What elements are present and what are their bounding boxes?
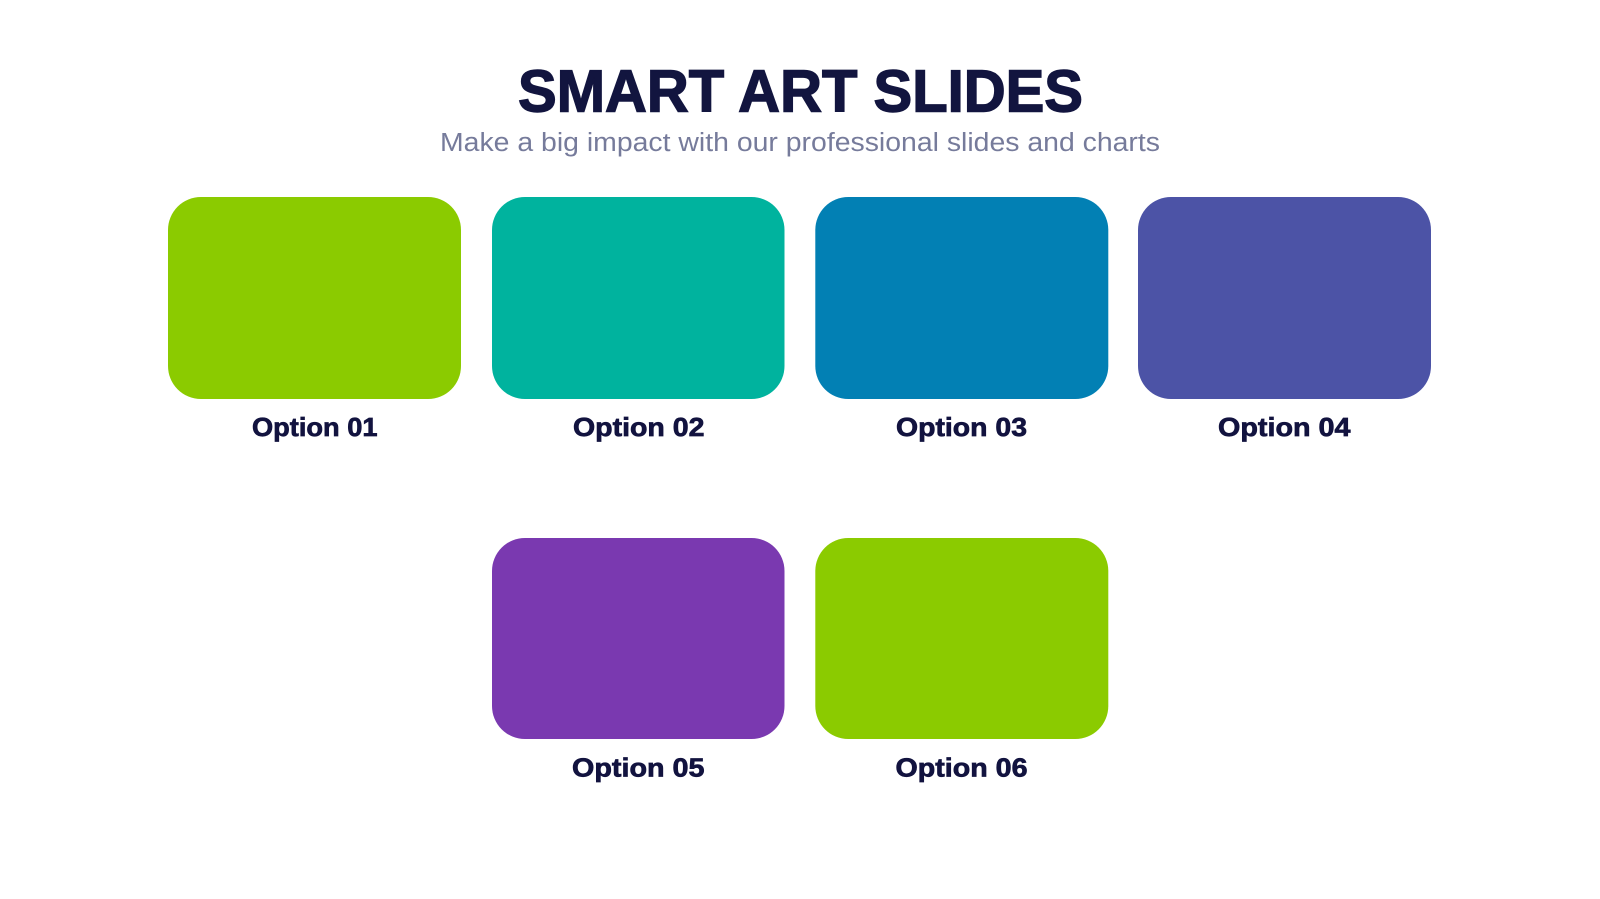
- panel: option 04: [1138, 197, 1431, 442]
- card: option 03: [815, 197, 1108, 399]
- panel: option 02: [492, 197, 784, 442]
- label: option 04: Option 04: [1218, 412, 1351, 442]
- panel: option 05: [492, 538, 784, 782]
- subtitle: Make a big impact with our professional slides and charts: [440, 129, 1160, 157]
- card: option 04: [1138, 197, 1431, 399]
- card: option 02: [492, 197, 784, 399]
- label: option 05: Option 05: [572, 752, 704, 782]
- label: option 01: Option 01: [252, 412, 378, 442]
- label: option 06: Option 06: [896, 752, 1028, 782]
- panel: option 06: [815, 538, 1108, 782]
- panel: option 01: [168, 197, 461, 442]
- panel: option 03: [815, 197, 1108, 442]
- label: option 03: Option 03: [896, 412, 1027, 442]
- label: option 02: Option 02: [573, 412, 704, 442]
- card: option 05: [492, 538, 784, 739]
- title: SMART ART SLIDES: [518, 58, 1083, 124]
- card: option 06: [815, 538, 1108, 739]
- card: option 01: [168, 197, 461, 399]
